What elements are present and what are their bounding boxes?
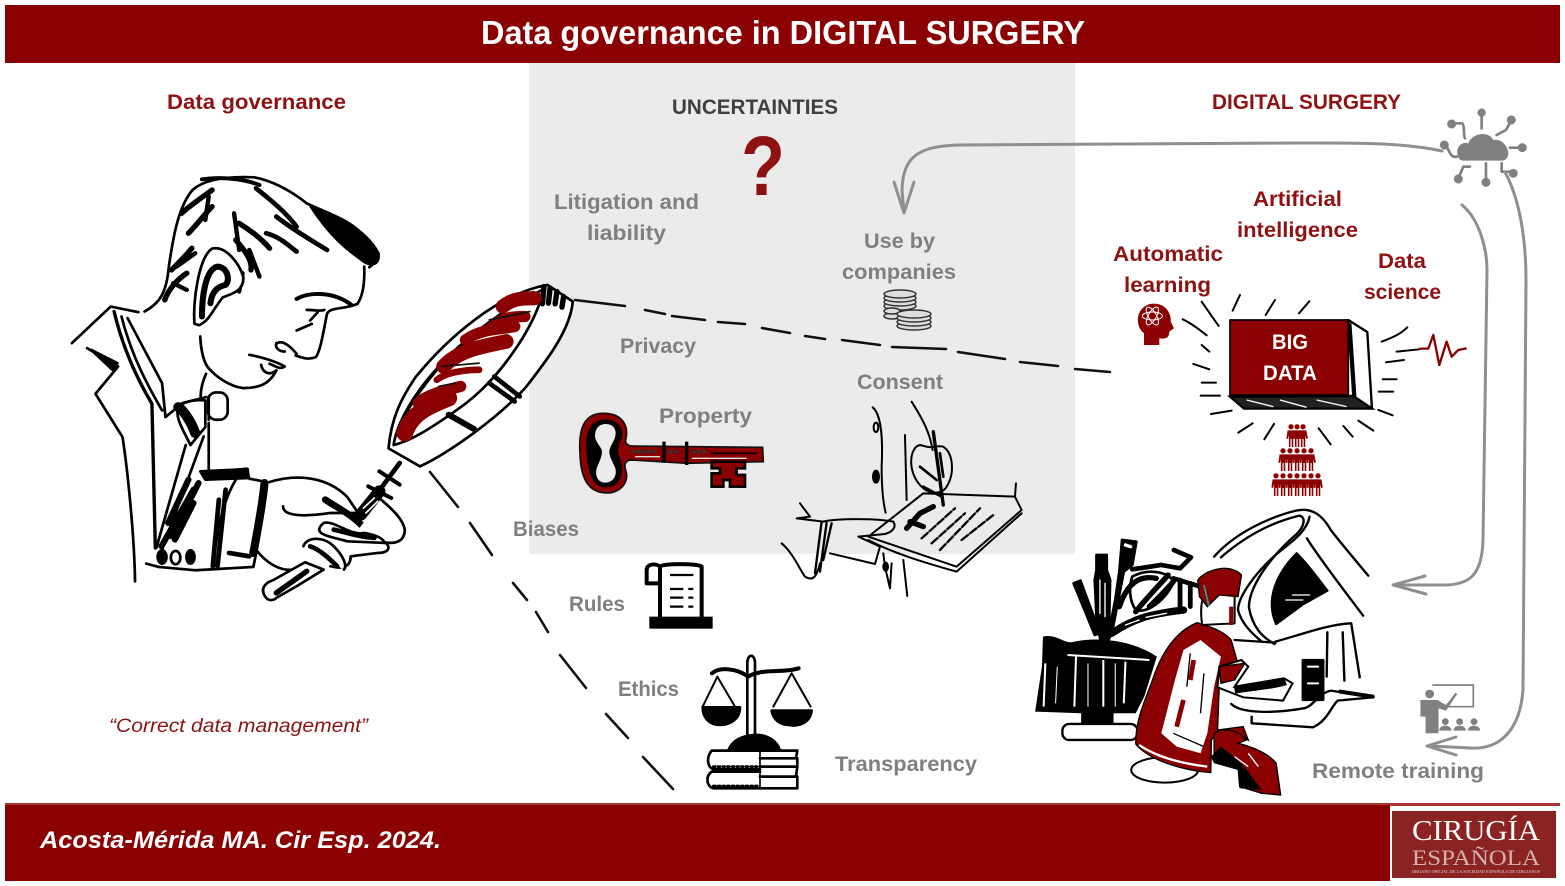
icon: rules scroll: [647, 564, 713, 629]
automatic learning: Automatic: [1113, 243, 1223, 266]
man head and hair: [144, 177, 379, 388]
footer bar: [5, 803, 1560, 881]
icon: big data box: [1138, 295, 1467, 444]
document: [868, 483, 1022, 572]
icon: pyramid of people: [1271, 424, 1323, 496]
label: big data: DATA: [1263, 362, 1317, 385]
label: big data: BIG: [1272, 331, 1308, 354]
panel: uncertainties background: [529, 63, 1075, 554]
illustration: signing consent: [782, 402, 1022, 596]
title: Data governance in DIGITAL SURGERY: [481, 14, 1085, 51]
heading: digital surgery: DIGITAL SURGERY: [1212, 91, 1401, 114]
logo: cirugia española: CIRUGÍA: [1412, 816, 1541, 847]
lens ink lines: [439, 312, 530, 386]
label: litigation and liability: liability: [587, 222, 666, 245]
red scribble in lens: [405, 298, 535, 433]
icon: cloud network: [1440, 109, 1527, 187]
label: transparency: Transparency: [835, 753, 977, 776]
icon: scales and books: [703, 656, 812, 788]
artificial intelligence: Artificial: [1253, 188, 1342, 211]
dashed line: lower magnifier ray: [430, 472, 673, 789]
label: remote training: Remote training: [1312, 760, 1484, 783]
label: use by companies: Use by: [864, 230, 935, 253]
label: ethics: Ethics: [618, 678, 679, 701]
label: litigation and liability: Litigation and: [554, 191, 699, 214]
magnifying glass: [361, 285, 573, 515]
illustration: robotic surgery console: [1035, 510, 1373, 795]
robot arms: [1074, 540, 1200, 643]
logo: cirugia española: [1392, 811, 1556, 878]
suit and arm: [782, 402, 952, 596]
arrow: cloud to surgeon: [1393, 205, 1487, 594]
labels: big data topics: [1113, 188, 1441, 304]
data science: science: [1364, 281, 1441, 304]
icon: question mark: ?: [741, 119, 785, 213]
label: property: Property: [659, 405, 752, 428]
heading: uncertainties: UNCERTAINTIES: [672, 96, 838, 119]
radiating lines: [1183, 295, 1419, 444]
man hand: [256, 478, 405, 600]
head with atom: [1138, 304, 1174, 345]
icon: remote training: [1420, 685, 1480, 733]
pulse line: [1419, 335, 1467, 365]
label: rules: Rules: [569, 593, 625, 616]
man suit: [72, 307, 267, 581]
label: use by companies: companies: [842, 261, 956, 284]
icon: coins: [884, 290, 931, 330]
label: biases: Biases: [513, 518, 579, 541]
heading: data governance: Data governance: [167, 91, 346, 114]
data science: Data: [1378, 250, 1426, 273]
logo: cirugia española: ESPAÑOLA: [1412, 845, 1540, 870]
icon: key: [580, 413, 763, 493]
label: correct data management: “Correct data management”: [109, 715, 370, 737]
logo: cirugia española: ÓRGANO OFICIAL DE LA SOCIEDAD ESPAÑOLA DE CIRUJANOS: [1412, 869, 1540, 874]
patient table: [1035, 636, 1157, 730]
label: consent: Consent: [857, 371, 943, 394]
label: privacy: Privacy: [620, 335, 696, 358]
arrow: cloud to use by companies: [894, 143, 1442, 213]
surgeon: [1131, 568, 1293, 795]
automatic learning: learning: [1124, 274, 1211, 297]
dashed line: upper magnifier ray: [575, 300, 1110, 372]
arrow: cloud to remote training: [1427, 172, 1526, 755]
illustration: man with magnifying glass: [72, 177, 573, 600]
artificial intelligence: intelligence: [1237, 219, 1358, 242]
citation: Acosta-Mérida MA. Cir Esp. 2024.: [39, 827, 441, 854]
title bar: [5, 5, 1560, 63]
console hood: [1214, 510, 1373, 727]
